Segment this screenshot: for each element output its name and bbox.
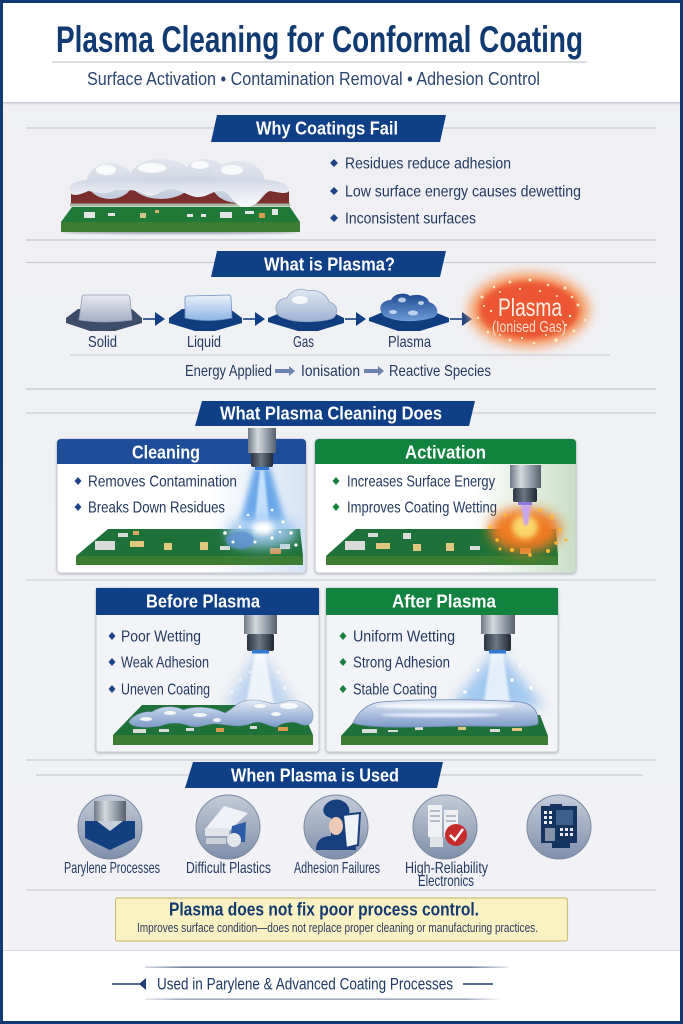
section: what plasma cleaning does bbox=[26, 401, 656, 573]
illustration: coating on PCB bbox=[61, 159, 300, 234]
icon: parylene bbox=[64, 795, 160, 877]
card: activation: Activation bbox=[405, 442, 486, 462]
ribbon heading: When Plasma is Used bbox=[231, 766, 399, 786]
card: cleaning: Breaks Down Residues bbox=[88, 500, 225, 516]
footer arrow left bbox=[112, 978, 146, 990]
bullet list: Low surface energy causes dewetting bbox=[345, 184, 581, 200]
card: activation: Improves Coating Wetting bbox=[347, 500, 497, 516]
state: liquid bbox=[169, 295, 242, 351]
bullets: Weak Adhesion bbox=[121, 654, 209, 672]
arrow bbox=[345, 312, 366, 326]
state: plasma: Plasma bbox=[388, 334, 431, 351]
bullet list bbox=[330, 156, 581, 228]
process flow bbox=[185, 363, 491, 380]
card: activation: Increases Surface Energy bbox=[347, 474, 495, 490]
nozzle bbox=[510, 465, 541, 505]
callout: Plasma does not fix poor process control. bbox=[169, 900, 479, 920]
process flow: Energy Applied bbox=[185, 363, 272, 380]
card: activation bbox=[315, 439, 576, 573]
callout bbox=[116, 898, 568, 941]
plasma spray bbox=[223, 468, 298, 549]
card: after plasma: After Plasma bbox=[392, 592, 497, 612]
bullets bbox=[108, 628, 210, 698]
callout: Improves surface condition—does not replace proper cleaning or manufacturing practices. bbox=[137, 920, 538, 935]
footer band bbox=[0, 950, 683, 1024]
card: before plasma: Before Plasma bbox=[146, 592, 261, 612]
icon: electronics module bbox=[527, 795, 591, 859]
subtitle: Surface Activation • Contamination Removal • Adhesion Control bbox=[87, 69, 540, 89]
plasma glow: (Ionised Gas) bbox=[492, 319, 566, 336]
card: cleaning: Removes Contamination bbox=[88, 474, 237, 490]
state: liquid: Liquid bbox=[187, 334, 221, 351]
bullet list: Inconsistent surfaces bbox=[345, 210, 476, 228]
state: solid: Solid bbox=[88, 334, 117, 351]
sparks bbox=[488, 505, 568, 557]
section: why coatings fail bbox=[26, 115, 656, 234]
arrow bbox=[450, 312, 472, 326]
process flow: Ionisation bbox=[301, 363, 360, 380]
bullets: Strong Adhesion bbox=[353, 654, 450, 672]
icon: difficult plastics: Difficult Plastics bbox=[186, 860, 271, 877]
card: after plasma bbox=[326, 588, 558, 752]
process flow: Reactive Species bbox=[389, 363, 491, 380]
state: gas: Gas bbox=[293, 334, 314, 351]
icon: adhesion failures bbox=[294, 795, 380, 877]
icon: parylene: Parylene Processes bbox=[64, 860, 160, 877]
ribbon heading: What is Plasma? bbox=[264, 254, 395, 274]
card: before plasma bbox=[96, 588, 319, 752]
nozzle bbox=[248, 428, 276, 470]
bullets: Stable Coating bbox=[353, 682, 437, 698]
PCB bbox=[326, 529, 558, 565]
card: cleaning: Cleaning bbox=[132, 442, 200, 462]
arrow bbox=[143, 312, 165, 326]
icon: high-reliability electronics: Electronics bbox=[418, 873, 474, 890]
ribbon heading: Why Coatings Fail bbox=[256, 118, 398, 138]
nozzle bbox=[481, 615, 515, 654]
icon: high-reliability electronics bbox=[405, 795, 488, 890]
icon: adhesion failures: Adhesion Failures bbox=[294, 860, 380, 877]
section: when plasma is used bbox=[36, 762, 643, 890]
footer text: Used in Parylene & Advanced Coating Processes bbox=[157, 974, 453, 994]
bullets: Uneven Coating bbox=[121, 682, 210, 698]
PCB with uneven coating bbox=[113, 700, 313, 745]
nozzle bbox=[244, 615, 277, 654]
header band bbox=[0, 0, 683, 102]
PCB with uniform coating bbox=[341, 700, 548, 745]
plasma glow bbox=[469, 273, 589, 347]
ribbon heading bbox=[195, 401, 475, 426]
state: gas bbox=[268, 289, 344, 351]
ribbon heading bbox=[185, 762, 443, 788]
bullets bbox=[340, 628, 455, 698]
PCB bbox=[76, 529, 303, 565]
state: plasma bbox=[369, 294, 449, 351]
icon: high-reliability electronics: High-Reliability bbox=[405, 860, 488, 877]
bullets: Uniform Wetting bbox=[353, 628, 455, 646]
spray bbox=[450, 648, 545, 708]
card: cleaning bbox=[57, 428, 306, 573]
plasma glow: Plasma bbox=[498, 294, 562, 322]
state: solid bbox=[66, 295, 142, 351]
ribbon heading bbox=[211, 115, 446, 142]
arrow bbox=[243, 312, 265, 326]
ribbon heading: What Plasma Cleaning Does bbox=[220, 404, 442, 424]
bullet list: Residues reduce adhesion bbox=[345, 156, 511, 172]
icon: difficult plastics bbox=[186, 795, 271, 877]
bullets: Poor Wetting bbox=[121, 628, 201, 646]
section: what is plasma bbox=[26, 251, 656, 380]
ribbon heading bbox=[211, 251, 446, 277]
spray bbox=[224, 648, 298, 708]
